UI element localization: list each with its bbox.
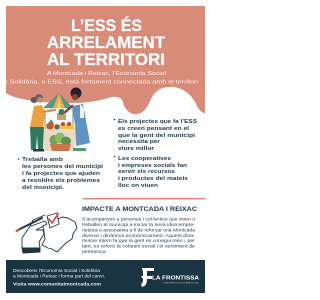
footer text: Descobreix l’Economia Social i Solidària [13, 268, 101, 273]
logo: La Frontissa [141, 268, 199, 287]
left woman [30, 94, 55, 152]
bullet list: right: que la gent del municipi [118, 133, 196, 139]
paragraph: impact [82, 216, 196, 254]
panel: footer [6, 260, 205, 293]
produce [45, 119, 74, 130]
bullet list: right [114, 119, 197, 189]
logo tagline: COMUNITAT D'ECONOMIA SOCIAL [163, 282, 199, 284]
panel: salmon header [6, 6, 205, 114]
hand [22, 215, 47, 248]
subtitle: A Montcada i Reixac, l’Economia Social [47, 71, 166, 77]
red check [49, 214, 58, 223]
bullet list: left: del municipi. [22, 185, 65, 191]
held box of vegetables [57, 109, 66, 120]
bullet list: right: viure millor [118, 146, 155, 152]
bullet list: right: servir els recursos [118, 169, 175, 175]
bullet list: left [18, 157, 104, 191]
ballot box [47, 213, 59, 228]
bullet list: left: Treballa amb [22, 157, 64, 163]
cuff [22, 248, 40, 253]
footer text [13, 268, 105, 286]
title [47, 16, 165, 69]
subtitle [6, 71, 198, 86]
title: L’ESS ÉS [71, 16, 142, 35]
subtitle: i Solidària, o ESS, està fortament connectada amb el territori [6, 80, 198, 86]
heading: impact: IMPACTE A MONTCADA I REIXAC [82, 206, 198, 213]
bullet list: right: necessita per [118, 139, 161, 145]
logo mark [141, 268, 154, 287]
awning [43, 93, 73, 110]
bullet list: right: i productes del mateix [118, 176, 189, 182]
stall counter [44, 128, 75, 151]
title: ARRELAMENT [47, 34, 165, 52]
bullet list: right: lloc on viuen [118, 183, 159, 189]
icon: hand marking map [16, 213, 77, 253]
bullet list: left: i fa projectes que ajuden [22, 171, 101, 177]
paragraph: impact: tant, es reforci la cohesió social i el sentiment de [82, 244, 196, 248]
paragraph: impact: pertinença. [82, 249, 107, 254]
illustration: market stall [30, 88, 90, 152]
footer text: a Montcada i Reixac i forma part del canvi. [13, 274, 105, 278]
pen tip [16, 230, 19, 231]
bullet list: right: Els projectes que fa l’ESS [118, 119, 197, 125]
footer text: Visita www.comunitatmontcada.com [13, 282, 101, 286]
bullet list: left: les persones del municipi [22, 164, 104, 170]
bullet list: left: a resoldre els problemes [22, 178, 100, 184]
logo name: LA FRONTISSA [152, 276, 199, 282]
bullet list: right: es creen pensant en el [118, 126, 190, 132]
right woman [63, 88, 90, 151]
bullet list: right: Les cooperatives [118, 156, 171, 162]
title: AL TERRITORI [47, 51, 165, 69]
pen [18, 218, 42, 230]
paragraph: impact: diversa i dinàmica econòmicament. Aquest dina- [82, 233, 196, 238]
paragraph: impact: nedora o associativa a fi de reforçar una Montcada [82, 228, 196, 232]
bullet list: right: i empreses socials fan [118, 163, 188, 169]
paragraph: impact: misme intern fa que la gent es conegui més i, per [82, 238, 196, 243]
divider line above impact [83, 198, 205, 200]
stall posts [45, 106, 73, 128]
map outline [42, 217, 77, 252]
paragraph: impact: treballen al municipi a iniciar la seva idea empre- [82, 222, 196, 227]
basket with greens [50, 132, 71, 151]
paragraph: impact: S’acompanyen a persones i col·lectius que viuen o [82, 216, 196, 222]
